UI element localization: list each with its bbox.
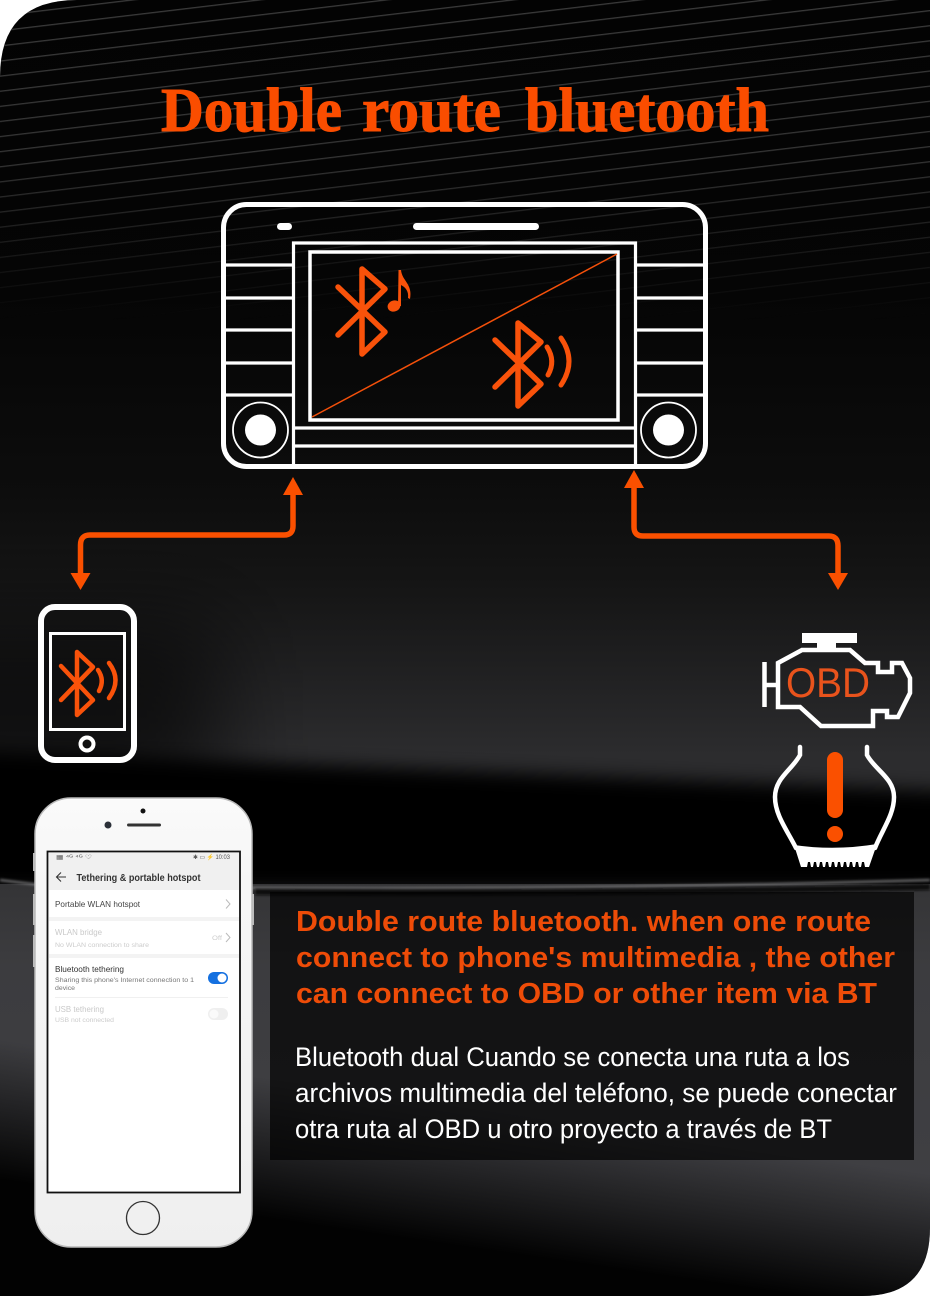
back arrow (56, 872, 66, 882)
icon: bluetooth with signal waves (495, 323, 569, 406)
icon: tire pressure warning (775, 747, 894, 867)
status bar (56, 853, 231, 861)
English description: Double route bluetooth. when one route (296, 906, 871, 938)
status bar: ✱ ▭ ⚡ 10:03 (193, 853, 231, 861)
English description (296, 906, 895, 1010)
text panel (270, 892, 914, 1160)
radio screen (310, 252, 618, 420)
radio outer frame (224, 204, 706, 466)
phone screen: Sharing this phone's Internet connection to 1 (55, 977, 194, 984)
setting rows: Portable WLAN hotspot (55, 900, 141, 909)
bluetooth toggle on (208, 972, 228, 984)
phone body (35, 798, 252, 1247)
smartphone mockup (33, 798, 254, 1247)
Spanish description: otra ruta al OBD u otro proyecto a través de BT (295, 1114, 832, 1144)
setting rows: Bluetooth tethering (55, 965, 124, 974)
row chevrons (226, 900, 230, 908)
screen diagonal divider (312, 254, 617, 417)
arrow: radio to OBD (624, 470, 848, 590)
icon: phone with bluetooth (41, 607, 134, 760)
home button (126, 1202, 160, 1234)
title (161, 77, 769, 145)
English description: connect to phone's multimedia , the other (296, 942, 895, 974)
usb toggle off (208, 1008, 228, 1020)
phone screen: No WLAN connection to share (55, 942, 149, 949)
phone side buttons (33, 853, 254, 967)
radio top indicators (277, 223, 539, 230)
radio bezel and button lines (225, 243, 704, 466)
screen title: Tethering & portable hotspot (76, 873, 201, 884)
front camera and speaker (104, 808, 161, 828)
icon: bluetooth with music note (338, 269, 411, 354)
setting rows (55, 900, 141, 1014)
icon: OBD engine (764, 633, 910, 726)
title: bluetooth (525, 77, 769, 145)
right knob (641, 402, 696, 458)
arrow: phone to radio (70, 477, 303, 590)
icon: OBD engine: OBD (786, 659, 870, 706)
Spanish description: archivos multimedia del teléfono, se puede conectar (295, 1078, 897, 1108)
phone screen (48, 852, 240, 1192)
phone screen: device (55, 985, 75, 992)
title: Double (161, 77, 342, 145)
phone screen: USB not connected (55, 1017, 114, 1024)
status bar: ▦ ⁴ᴳ ⁴ᴳ ♡ (56, 854, 92, 861)
English description: can connect to OBD or other item via BT (296, 978, 877, 1010)
Spanish description: Bluetooth dual Cuando se conecta una ruta a los (295, 1042, 850, 1072)
title: route (362, 77, 501, 145)
Spanish description (295, 1042, 897, 1144)
phone screen: Off (212, 935, 222, 942)
setting rows: USB tethering (55, 1005, 104, 1014)
left knob (233, 402, 288, 458)
setting rows: WLAN bridge (55, 928, 102, 937)
car radio head unit (224, 204, 706, 466)
